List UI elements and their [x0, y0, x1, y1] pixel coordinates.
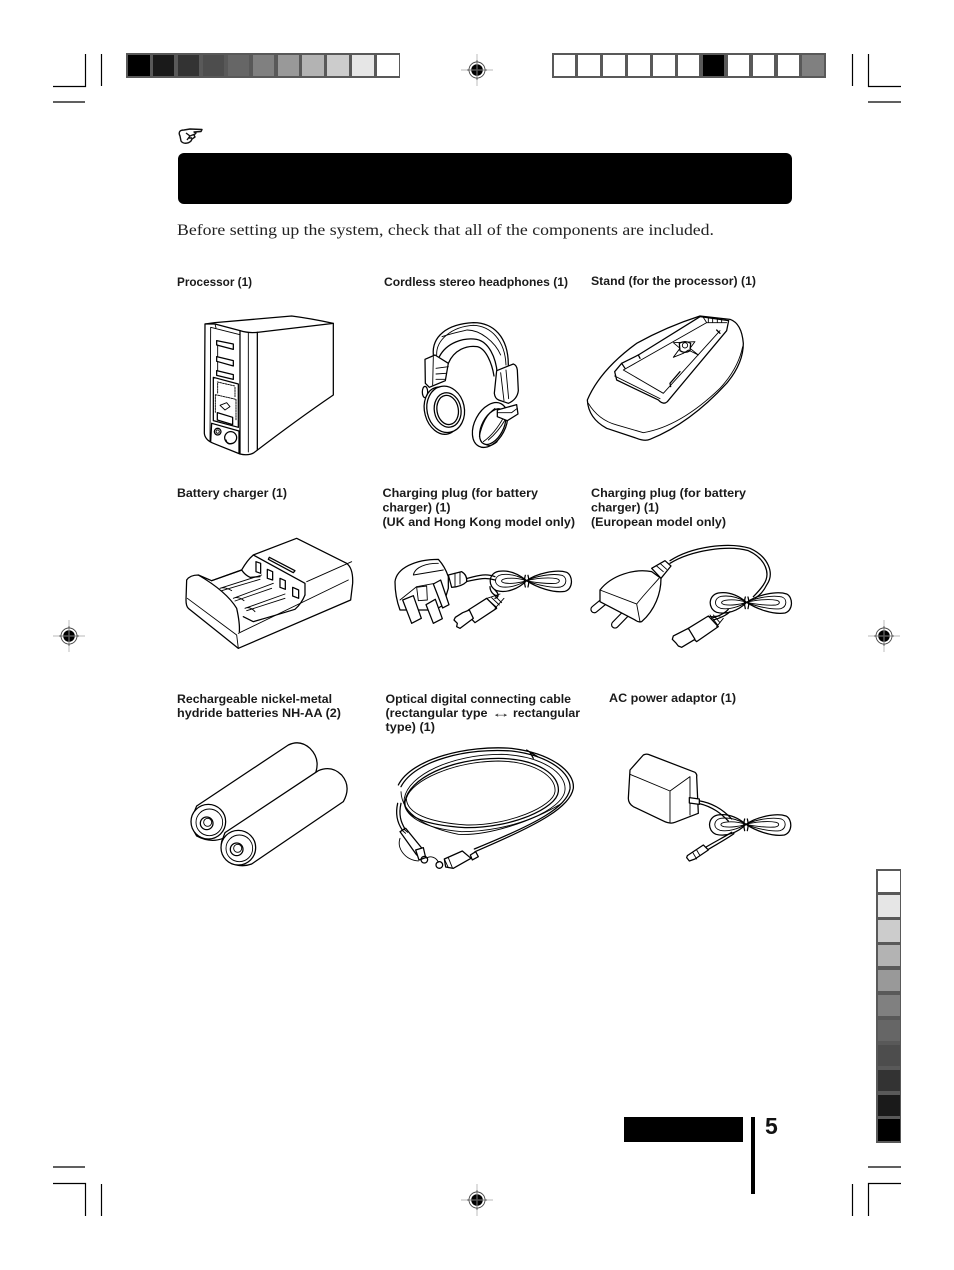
- icon: pointing hand: [179, 129, 202, 143]
- label: batteries: [177, 692, 341, 720]
- label: optical cable: (rectangular type: [386, 706, 488, 720]
- label: optical cable: type) (1): [386, 720, 435, 734]
- colour bar: top right: [552, 53, 826, 78]
- registration mark: bottom: [461, 1184, 493, 1216]
- label: UK charging plug: (UK and Hong Kong model only): [382, 515, 575, 529]
- registration mark: top: [461, 54, 493, 86]
- colour bar: top left grayscale: [126, 53, 400, 78]
- label: UK charging plug: Charging plug (for battery: [382, 486, 538, 500]
- label: AC adaptor: AC power adaptor (1): [609, 691, 736, 705]
- label: UK charging plug: [382, 486, 575, 529]
- label: batteries: Rechargeable nickel-metal: [177, 692, 332, 706]
- illustration: headphones: [419, 323, 518, 453]
- illustration: batteries: [191, 743, 347, 866]
- label: European charging plug: Charging plug (for battery: [591, 486, 746, 500]
- registration mark: right: [868, 620, 900, 652]
- label: UK charging plug: charger) (1): [382, 500, 450, 514]
- label: European charging plug: (European model only): [591, 515, 726, 529]
- illustration: AC power adaptor: [628, 754, 791, 861]
- intro text: Before setting up the system, check that all of the components are included.: [177, 222, 714, 239]
- illustration: optical cable: [397, 748, 573, 868]
- label: optical cable: [386, 692, 580, 734]
- illustration: battery charger: [186, 538, 353, 648]
- page number: 5: [765, 1113, 778, 1139]
- label: processor: Processor (1): [177, 275, 252, 289]
- footer black bar: [624, 1117, 743, 1142]
- label: European charging plug: [591, 486, 746, 529]
- heading bar: [178, 153, 792, 204]
- footer vertical rule: [751, 1117, 755, 1194]
- registration mark: left: [53, 620, 85, 652]
- illustration: stand: [587, 316, 743, 440]
- label: batteries: hydride batteries NH-AA (2): [177, 706, 341, 720]
- illustration: European charging plug: [594, 545, 791, 647]
- label: optical cable: rectangular: [513, 706, 580, 720]
- label: optical cable: ↔: [491, 706, 511, 720]
- colour bar: right side vertical: [876, 869, 901, 1143]
- illustration: processor: [204, 316, 333, 455]
- label: optical cable: Optical digital connecting cable: [386, 692, 571, 706]
- label: headphones: Cordless stereo headphones (1): [384, 275, 568, 289]
- label: battery charger: Battery charger (1): [177, 486, 287, 500]
- illustration: UK charging plug: [395, 559, 571, 628]
- label: stand: Stand (for the processor) (1): [591, 274, 756, 288]
- label: European charging plug: charger) (1): [591, 500, 659, 514]
